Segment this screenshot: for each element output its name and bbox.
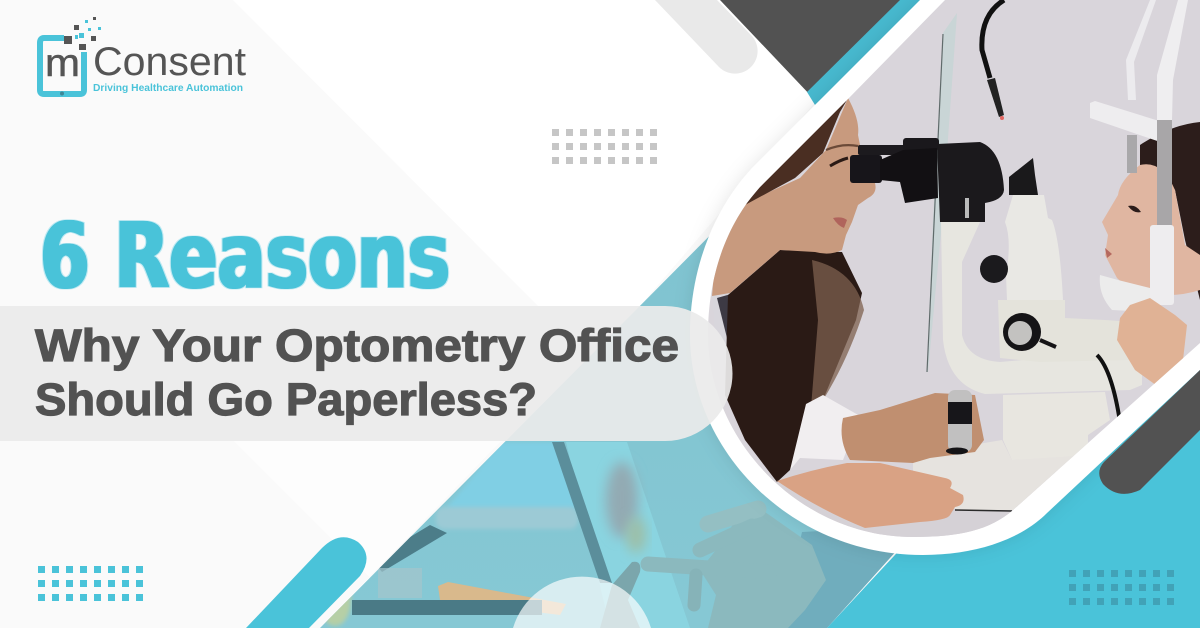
notebook (438, 582, 566, 615)
blurred window background (445, 442, 577, 510)
logo tablet icon (40, 38, 84, 94)
tablet photo panel (320, 236, 894, 628)
microscope column (1005, 195, 1063, 300)
logo: miConsent (40, 17, 246, 96)
dark pill lower right (1099, 370, 1200, 494)
top finger (708, 509, 758, 524)
front hand (777, 463, 964, 528)
clear glass plate (927, 13, 957, 372)
index finger (648, 564, 770, 572)
woman lips (833, 217, 847, 228)
tablet edge (552, 442, 612, 583)
dot grid: dark teal (1069, 570, 1174, 605)
laptop bar (436, 507, 578, 529)
lower finger (694, 575, 696, 605)
black side knob (980, 255, 1008, 283)
child face (1102, 164, 1200, 295)
hand palm (700, 505, 826, 628)
logo home button (60, 92, 64, 96)
platform (913, 440, 1070, 510)
white ring around photo (690, 0, 1200, 555)
woman collar (712, 285, 745, 345)
microscope arm (941, 222, 1142, 394)
hand sleeve (788, 531, 894, 628)
headrest bar (1090, 101, 1172, 146)
dark desk edge (352, 600, 542, 615)
subtitle text (35, 320, 679, 425)
middle finger (700, 526, 752, 550)
woman eyebrow (826, 145, 858, 150)
teal top band (807, 0, 925, 105)
desk stand (372, 525, 447, 572)
lower microscope head (998, 300, 1124, 360)
woman sweater (790, 395, 860, 470)
back hand (842, 393, 984, 463)
woman eye (830, 158, 848, 166)
column cap (1009, 158, 1038, 195)
dot grid: grey (552, 129, 657, 164)
chinrest post (1150, 225, 1174, 305)
child hair (1140, 122, 1200, 300)
logo pixels (64, 17, 101, 50)
optometry photo (690, 0, 1200, 545)
child lips (1105, 248, 1112, 258)
teal pill bottom left (246, 537, 367, 628)
subtitle text: Should Go Paperless? (35, 374, 537, 425)
bottom right teal panel (827, 360, 1200, 628)
cable (982, 0, 1004, 78)
desk surface (763, 470, 1013, 537)
woman face (712, 98, 876, 296)
title: 6 Reasons: 6 Reasons (40, 204, 450, 309)
screen reflection (606, 462, 638, 538)
child hand (1117, 298, 1187, 388)
focus dial (1003, 313, 1041, 351)
chinrest rod (1157, 120, 1172, 228)
child eye (1128, 206, 1141, 212)
black cable (1097, 355, 1120, 422)
dot grid: bright teal (38, 566, 143, 601)
logo wordmark: Consent (93, 40, 246, 84)
subtitle band (0, 306, 732, 441)
joystick (946, 390, 972, 454)
dark top polygon (720, 0, 905, 97)
woman upper hair (745, 100, 847, 205)
binocular (850, 138, 1004, 222)
microscope base block (1003, 392, 1110, 460)
central pale circle bottom (513, 577, 651, 628)
headrest upright right (1157, 0, 1188, 120)
chin cup (1100, 275, 1150, 312)
logo tagline: Driving Healthcare Automation (93, 82, 243, 94)
logo m: m (45, 42, 80, 85)
green blur at desk edge (325, 596, 353, 628)
thumb (600, 562, 640, 628)
tablet screen (566, 442, 690, 628)
pale top pill (655, 0, 758, 74)
subtitle text: Why Your Optometry Office (35, 320, 679, 371)
woman lower hair (725, 250, 862, 482)
headrest upright left (1126, 0, 1156, 100)
